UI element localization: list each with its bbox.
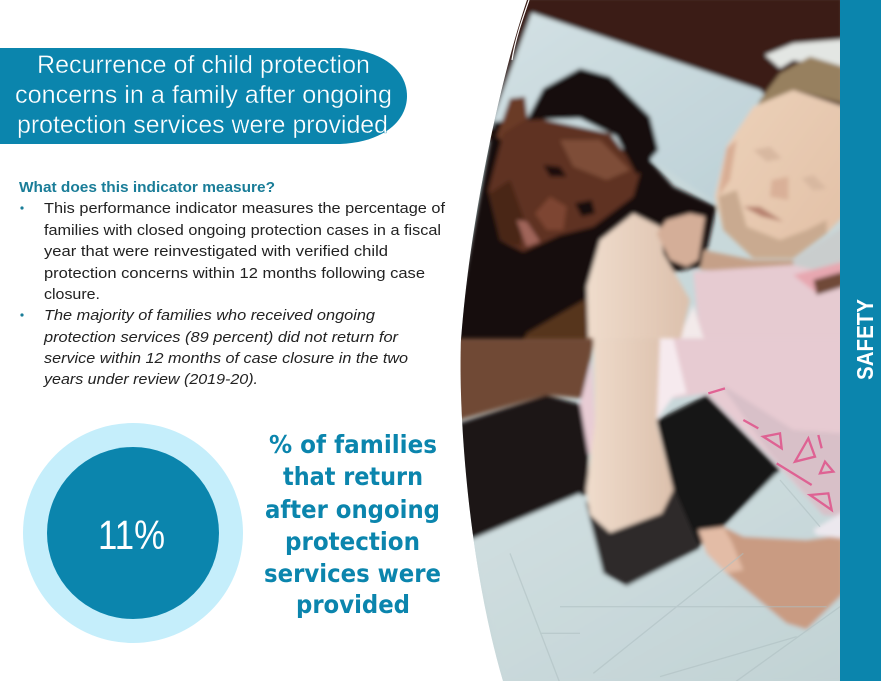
title banner: Recurrence of child protection [37,51,370,79]
bullet: majority of families: The majority of families who received ongoing [44,308,375,324]
donut stat: 11 percent [23,423,243,643]
donut stat: 11 percent: 11% [98,512,165,558]
bullet: indicator definition: families with closed ongoing protection cases in a fiscal [44,223,441,239]
stat caption [264,430,441,619]
sidebar: safety: SAFETY [852,299,878,380]
heading: what does this indicator measure: What does this indicator measure? [19,180,275,196]
photo: two fathers with baby on a bed [450,0,845,681]
stat caption: provided [296,590,410,619]
stat caption: that return [283,462,423,491]
text block: what does this indicator measure [19,180,446,388]
stat caption: protection [285,527,420,556]
stat caption: services were [264,559,441,588]
stat caption: after ongoing [265,495,440,524]
bullet: majority of families [20,308,408,388]
title banner: protection services were provided [17,111,388,139]
stat caption: % of families [269,430,437,459]
title banner: concerns in a family after ongoing [15,81,392,109]
bullet: majority of families: protection services (89 percent) did not return for [43,330,399,346]
bullet: majority of families: service within 12 months of case closure in the two [44,351,408,367]
bullet: indicator definition: year that were reinvestigated with verified child [44,244,388,260]
bullet: majority of families: years under review (2019-20). [43,372,258,388]
bullet: indicator definition: This performance indicator measures the percentage of [44,201,446,217]
bullet: indicator definition: protection concerns within 12 months following case [44,266,425,282]
title banner [0,48,407,144]
bullet: indicator definition: closure. [44,287,100,303]
sidebar: safety [840,0,881,681]
bullet: indicator definition [20,201,446,303]
